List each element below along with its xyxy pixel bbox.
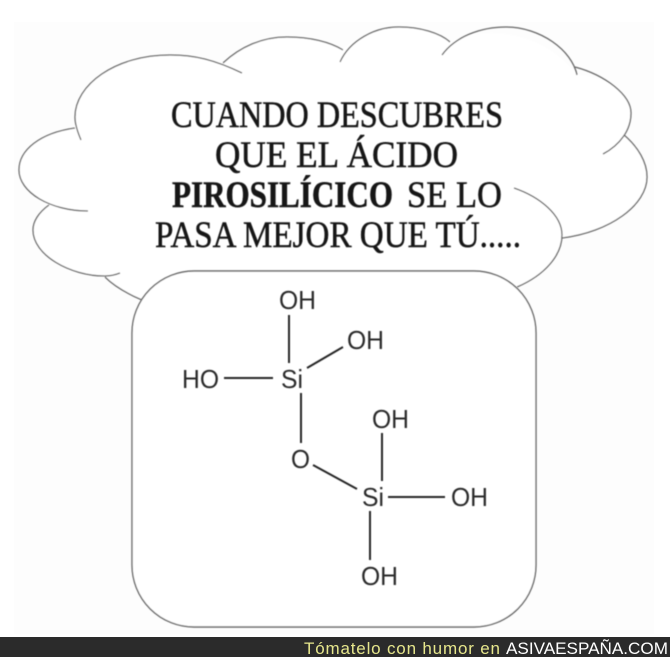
chemical structure: pyrosilicic acid: Si [362, 482, 384, 512]
headline text [155, 95, 521, 256]
chemical structure: pyrosilicic acid: OH [361, 561, 398, 591]
headline text: PIROSILÍCICO [172, 174, 393, 216]
chemical structure: pyrosilicic acid: OH [347, 325, 384, 355]
chemical structure: pyrosilicic acid: OH [451, 482, 488, 512]
headline text: SE LO [407, 175, 502, 216]
chemical structure: pyrosilicic acid: O [291, 444, 310, 474]
chemical structure: pyrosilicic acid: HO [182, 364, 219, 394]
cloud speech bubble [19, 27, 647, 300]
chemical structure: pyrosilicic acid: Si [281, 364, 303, 394]
headline text: PASA MEJOR QUE TÚ..... [155, 214, 521, 256]
headline text: QUE EL ÁCIDO [215, 134, 458, 176]
chemical structure: pyrosilicic acid [182, 285, 488, 591]
chemical structure: pyrosilicic acid: OH [372, 404, 409, 434]
rounded panel: molecule frame [132, 271, 536, 627]
headline text: CUANDO DESCUBRES [171, 95, 503, 136]
footer bar [0, 637, 670, 657]
chemical structure: pyrosilicic acid: OH [279, 285, 316, 315]
